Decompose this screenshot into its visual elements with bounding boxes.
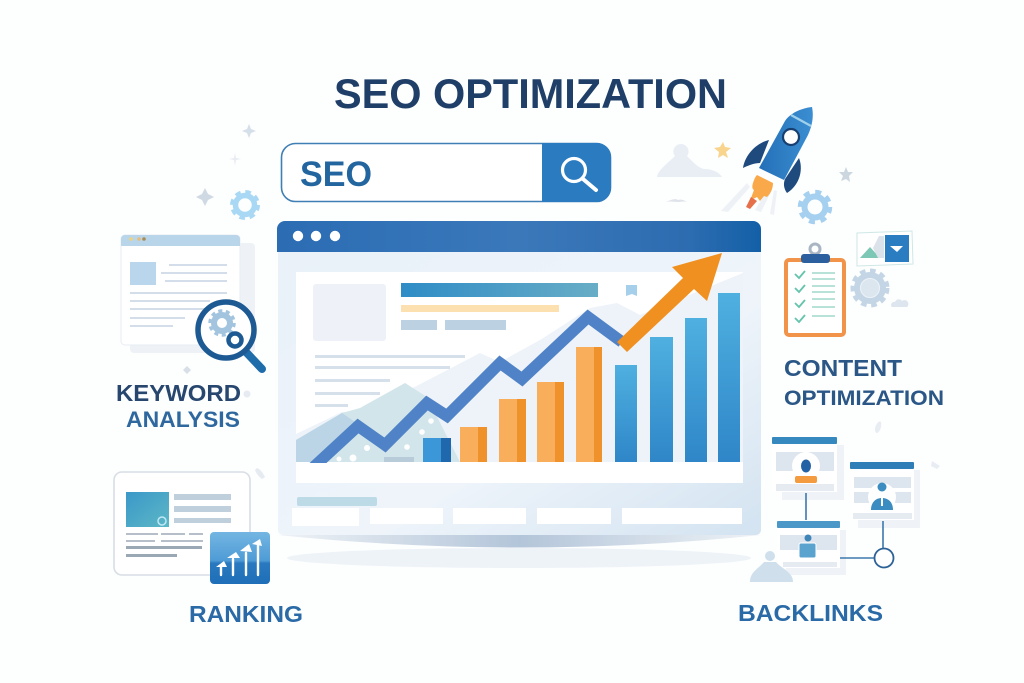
keyword window — [121, 235, 240, 345]
browser title bar — [277, 221, 761, 252]
image placeholder — [130, 262, 156, 285]
small cloud — [891, 299, 908, 307]
small ground bar — [384, 457, 414, 462]
badge arrows — [221, 545, 258, 575]
content label: CONTENT — [784, 355, 902, 381]
title: SEO OPTIMIZATION — [334, 70, 727, 117]
rocket flame — [751, 175, 773, 201]
lower section cards — [292, 508, 742, 526]
window shadows — [782, 445, 920, 575]
tag chips — [401, 320, 506, 330]
growth arrow — [617, 253, 722, 352]
window dots — [293, 231, 340, 241]
subheading bar — [401, 305, 559, 312]
ranking image — [126, 492, 169, 527]
bar chart — [423, 293, 740, 462]
trend line — [305, 317, 622, 475]
rocket tip flame — [746, 197, 757, 209]
text lines — [315, 355, 465, 407]
browser base shadow — [287, 548, 751, 568]
optimization label: OPTIMIZATION — [784, 386, 944, 410]
panel: content optimization — [784, 231, 944, 410]
panel: backlinks — [738, 421, 940, 626]
chart dots — [336, 418, 434, 462]
rocket — [721, 107, 813, 215]
thumbnail placeholder — [313, 284, 386, 341]
ranking card — [114, 472, 250, 575]
backlink window bottom — [777, 521, 840, 568]
background area chart blue — [296, 413, 358, 462]
icon: gear — [853, 271, 887, 305]
backlink window top left — [772, 437, 837, 492]
photo mountains — [860, 247, 880, 258]
exhaust trail — [721, 183, 777, 215]
infographic canvas — [113, 79, 943, 622]
rocket stripe — [791, 115, 811, 126]
header dots — [129, 237, 146, 241]
icon: gear left — [232, 192, 258, 218]
panel: ranking — [114, 468, 303, 627]
search button — [542, 143, 611, 202]
keyword label: KEYWORD — [116, 380, 241, 406]
decorative diamond — [183, 366, 191, 374]
photo tile — [885, 235, 909, 262]
search bar — [282, 143, 611, 202]
panel: keyword analysis — [116, 235, 262, 432]
rocket left fin — [743, 140, 769, 168]
background area chart light — [296, 273, 743, 462]
analysis label: ANALYSIS — [126, 407, 240, 432]
decorative blobs — [875, 421, 940, 469]
rocket window — [783, 129, 799, 145]
headline bar — [401, 283, 598, 297]
page content panel — [296, 272, 743, 483]
decorative sparkles left — [196, 124, 256, 206]
checkmarks — [795, 271, 805, 322]
ranking text lines — [126, 533, 203, 542]
photo frame — [857, 231, 913, 266]
icon: magnifier — [562, 158, 596, 190]
ranking badge — [210, 532, 270, 584]
decorative bird — [666, 199, 687, 202]
decorative dot — [244, 390, 250, 398]
connector lines — [806, 493, 883, 558]
clipboard ring — [810, 244, 820, 254]
clipboard clip — [801, 254, 830, 263]
rocket body — [759, 107, 813, 180]
backlink window right — [850, 462, 914, 520]
search query text: SEO — [300, 155, 372, 194]
clipboard — [786, 260, 844, 335]
small bookmark — [626, 285, 637, 296]
rocket right fin — [784, 158, 801, 193]
decorative shape — [255, 468, 265, 479]
browser window — [277, 221, 761, 568]
keyword window shadow — [130, 243, 255, 353]
connector node — [874, 548, 894, 568]
checklist lines — [812, 273, 835, 316]
decorative star gold — [714, 142, 731, 158]
keyword window header — [121, 235, 240, 246]
cloud person — [750, 551, 793, 582]
decorative star grey — [839, 167, 853, 182]
icon: magnifying glass — [198, 302, 262, 369]
background area chart teal — [296, 383, 460, 462]
decorative cloud top right — [657, 144, 722, 177]
ranking side lines — [174, 494, 231, 523]
ranking label: RANKING — [189, 601, 303, 627]
lower section label — [297, 497, 377, 506]
browser body — [278, 240, 761, 535]
icon: gear right — [800, 192, 830, 222]
backlinks label: BACKLINKS — [738, 600, 883, 626]
text lines — [130, 264, 227, 327]
